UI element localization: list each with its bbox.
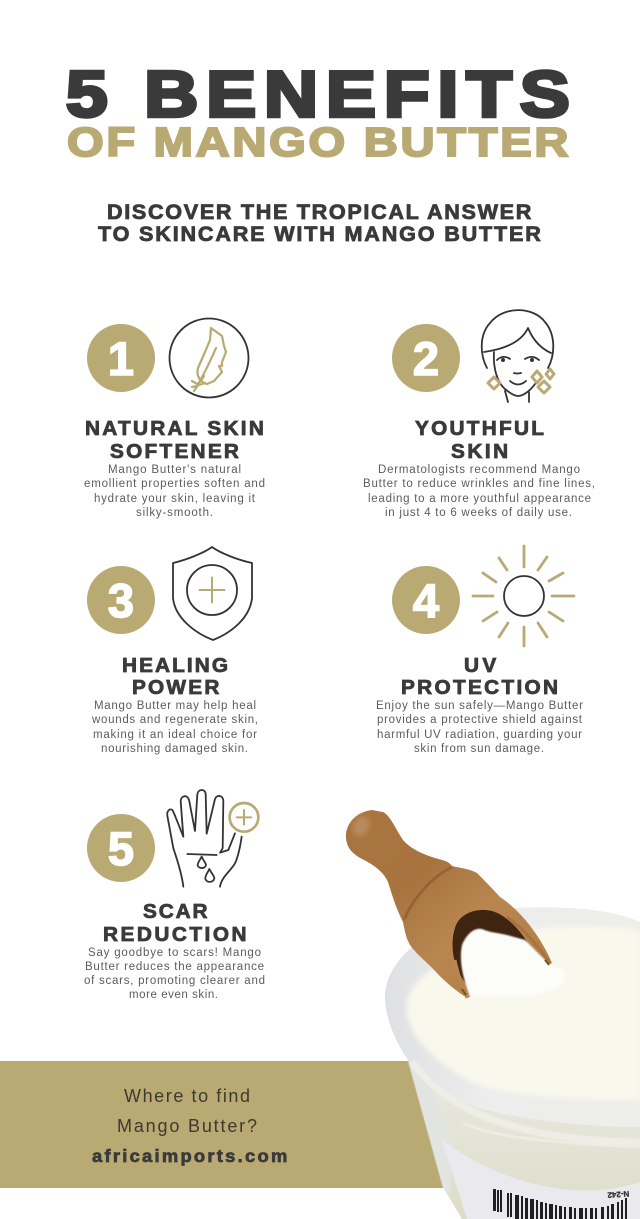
body text: Enjoy the sun safely—Mango Butter bbox=[376, 700, 583, 712]
icon: hand with scar and plus bbox=[167, 790, 258, 887]
body text: Dermatologists recommend Mango bbox=[378, 464, 580, 476]
knob highlight bbox=[349, 813, 373, 839]
heading: SKIN bbox=[451, 441, 508, 463]
icon: feather in circle bbox=[170, 318, 248, 398]
panel: benefit 3 healing power bbox=[87, 547, 258, 755]
body text bbox=[91, 700, 258, 755]
number badge 5: 5 bbox=[108, 822, 134, 875]
scoop lip bbox=[455, 960, 467, 998]
tub rim bbox=[385, 907, 640, 1127]
number badge 2 bbox=[392, 324, 460, 392]
heading bbox=[122, 655, 228, 699]
footer call to action: africaimports.com bbox=[92, 1146, 287, 1166]
number badge 3: 3 bbox=[108, 574, 134, 627]
subtitle: TO SKINCARE WITH MANGO BUTTER bbox=[98, 222, 541, 246]
body text: Butter reduces the appearance bbox=[85, 961, 264, 973]
tub body bbox=[408, 1060, 640, 1219]
powder specks bbox=[462, 960, 549, 995]
wooden scoop bbox=[346, 810, 552, 998]
number badge 2: 2 bbox=[413, 332, 439, 385]
heading: PROTECTION bbox=[401, 677, 558, 699]
panel: benefit 5 scar reduction bbox=[84, 790, 265, 1001]
subtitle: DISCOVER THE TROPICAL ANSWER bbox=[107, 200, 531, 224]
subtitle bbox=[98, 200, 541, 246]
body text: harmful UV radiation, guarding your bbox=[377, 729, 582, 741]
title: 5 BENEFITS bbox=[66, 58, 570, 130]
scoop opening bbox=[453, 910, 527, 990]
product photo: tub of mango butter with wooden scoop bbox=[346, 810, 640, 1219]
body text bbox=[84, 464, 265, 519]
body text: more even skin. bbox=[129, 989, 218, 1001]
number badge 3 bbox=[87, 566, 155, 634]
body text: of scars, promoting clearer and bbox=[84, 975, 265, 987]
label bbox=[442, 1140, 640, 1219]
body text: Say goodbye to scars! Mango bbox=[88, 947, 261, 959]
footer call to action: Mango Butter? bbox=[117, 1116, 257, 1136]
body text: in just 4 to 6 weeks of daily use. bbox=[385, 507, 572, 519]
body text: hydrate your skin, leaving it bbox=[94, 493, 256, 505]
body text: making it an ideal choice for bbox=[93, 729, 257, 741]
number badge 4 bbox=[392, 566, 460, 634]
body text: Mango Butter may help heal bbox=[94, 700, 256, 712]
body text: wounds and regenerate skin, bbox=[91, 714, 258, 726]
scoop ridge shading bbox=[404, 867, 452, 920]
body text bbox=[363, 464, 595, 519]
heading bbox=[401, 655, 558, 699]
body text: Mango Butter's natural bbox=[108, 464, 241, 476]
body text: nourishing damaged skin. bbox=[101, 743, 248, 755]
heading: POWER bbox=[132, 677, 220, 699]
icon: face with sparkles bbox=[482, 310, 554, 402]
heading bbox=[103, 901, 247, 946]
barcode bbox=[493, 1189, 629, 1219]
butter surface bbox=[407, 926, 640, 1100]
title: OF MANGO BUTTER bbox=[67, 120, 568, 165]
heading: HEALING bbox=[122, 655, 228, 677]
panel: benefit 4 uv protection bbox=[376, 546, 583, 755]
body text: skin from sun damage. bbox=[414, 743, 544, 755]
heading bbox=[415, 418, 544, 463]
footer band bbox=[0, 1061, 450, 1188]
number badge 1: 1 bbox=[108, 332, 134, 385]
footer call to action: Where to find bbox=[124, 1086, 250, 1106]
heading: REDUCTION bbox=[103, 924, 247, 946]
tub rim lower band bbox=[412, 1062, 640, 1142]
heading: YOUTHFUL bbox=[415, 418, 544, 440]
heading: SOFTENER bbox=[110, 441, 239, 463]
number badge 5 bbox=[87, 814, 155, 882]
barcode: N-242 bbox=[607, 1189, 629, 1200]
icon: sun bbox=[473, 546, 574, 646]
heading: UV bbox=[464, 655, 497, 677]
panel: benefit 2 youthful skin bbox=[363, 310, 595, 519]
panel: benefit 1 natural skin softener bbox=[84, 318, 265, 519]
body text bbox=[84, 947, 265, 1001]
butter powder in scoop bbox=[461, 929, 564, 997]
body text: silky-smooth. bbox=[136, 507, 213, 519]
body text: leading to a more youthful appearance bbox=[368, 493, 591, 505]
icon: shield with plus bbox=[173, 547, 252, 640]
number badge 4: 4 bbox=[413, 574, 439, 627]
body text: Butter to reduce wrinkles and fine lines, bbox=[363, 478, 595, 490]
body text bbox=[376, 700, 583, 755]
title bbox=[66, 58, 570, 165]
heading: SCAR bbox=[143, 901, 208, 923]
footer call to action bbox=[92, 1086, 287, 1166]
number badge 1 bbox=[87, 324, 155, 392]
body text: provides a protective shield against bbox=[377, 714, 583, 726]
body text: emollient properties soften and bbox=[84, 478, 265, 490]
heading: NATURAL SKIN bbox=[85, 418, 264, 440]
heading bbox=[85, 418, 264, 463]
